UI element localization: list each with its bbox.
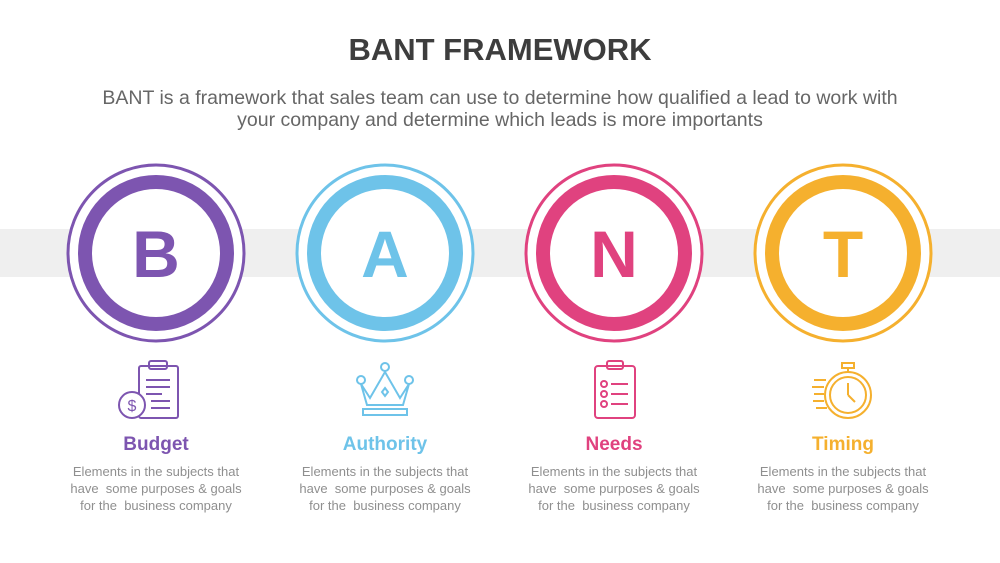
label: Authority: Authority bbox=[343, 434, 427, 455]
circle B: B bbox=[132, 217, 180, 291]
desc: Needs: for the business company bbox=[538, 498, 690, 513]
circle A: A bbox=[361, 217, 409, 291]
circle N bbox=[526, 165, 702, 341]
desc: Budget: Elements in the subjects that bbox=[73, 464, 239, 479]
icon: stopwatch bbox=[812, 363, 871, 418]
icon: budget clipboard with coin: $ bbox=[128, 398, 137, 415]
subtitle bbox=[102, 87, 898, 131]
icon: crown bbox=[357, 363, 413, 415]
desc: Authority: Elements in the subjects that bbox=[302, 464, 468, 479]
desc: Timing: Elements in the subjects that bbox=[760, 464, 926, 479]
circle T: T bbox=[823, 217, 863, 291]
circle A bbox=[297, 165, 473, 341]
desc: Needs bbox=[528, 464, 700, 513]
subtitle: BANT is a framework that sales team can use to determine how qualified a lead to work with bbox=[102, 87, 898, 109]
desc: Timing: for the business company bbox=[767, 498, 919, 513]
desc: Needs: have some purposes & goals bbox=[528, 481, 700, 496]
desc: Authority: have some purposes & goals bbox=[299, 481, 471, 496]
desc: Needs: Elements in the subjects that bbox=[531, 464, 697, 479]
desc: Authority: for the business company bbox=[309, 498, 461, 513]
label: Budget: Budget bbox=[123, 434, 189, 455]
icon: checklist clipboard bbox=[595, 361, 635, 418]
desc: Timing: have some purposes & goals bbox=[757, 481, 929, 496]
circle B bbox=[68, 165, 244, 341]
circle T bbox=[755, 165, 931, 341]
desc: Budget: for the business company bbox=[80, 498, 232, 513]
circle N: N bbox=[590, 217, 638, 291]
icon: budget clipboard with coin bbox=[119, 361, 178, 418]
gray band bbox=[0, 229, 1000, 277]
label: Needs: Needs bbox=[585, 434, 643, 455]
desc: Budget bbox=[70, 464, 242, 513]
desc: Timing bbox=[757, 464, 929, 513]
subtitle: your company and determine which leads is more importants bbox=[237, 109, 763, 131]
desc: Budget: have some purposes & goals bbox=[70, 481, 242, 496]
desc: Authority bbox=[299, 464, 471, 513]
label: Timing: Timing bbox=[812, 434, 874, 455]
title: BANT FRAMEWORK bbox=[348, 32, 652, 67]
